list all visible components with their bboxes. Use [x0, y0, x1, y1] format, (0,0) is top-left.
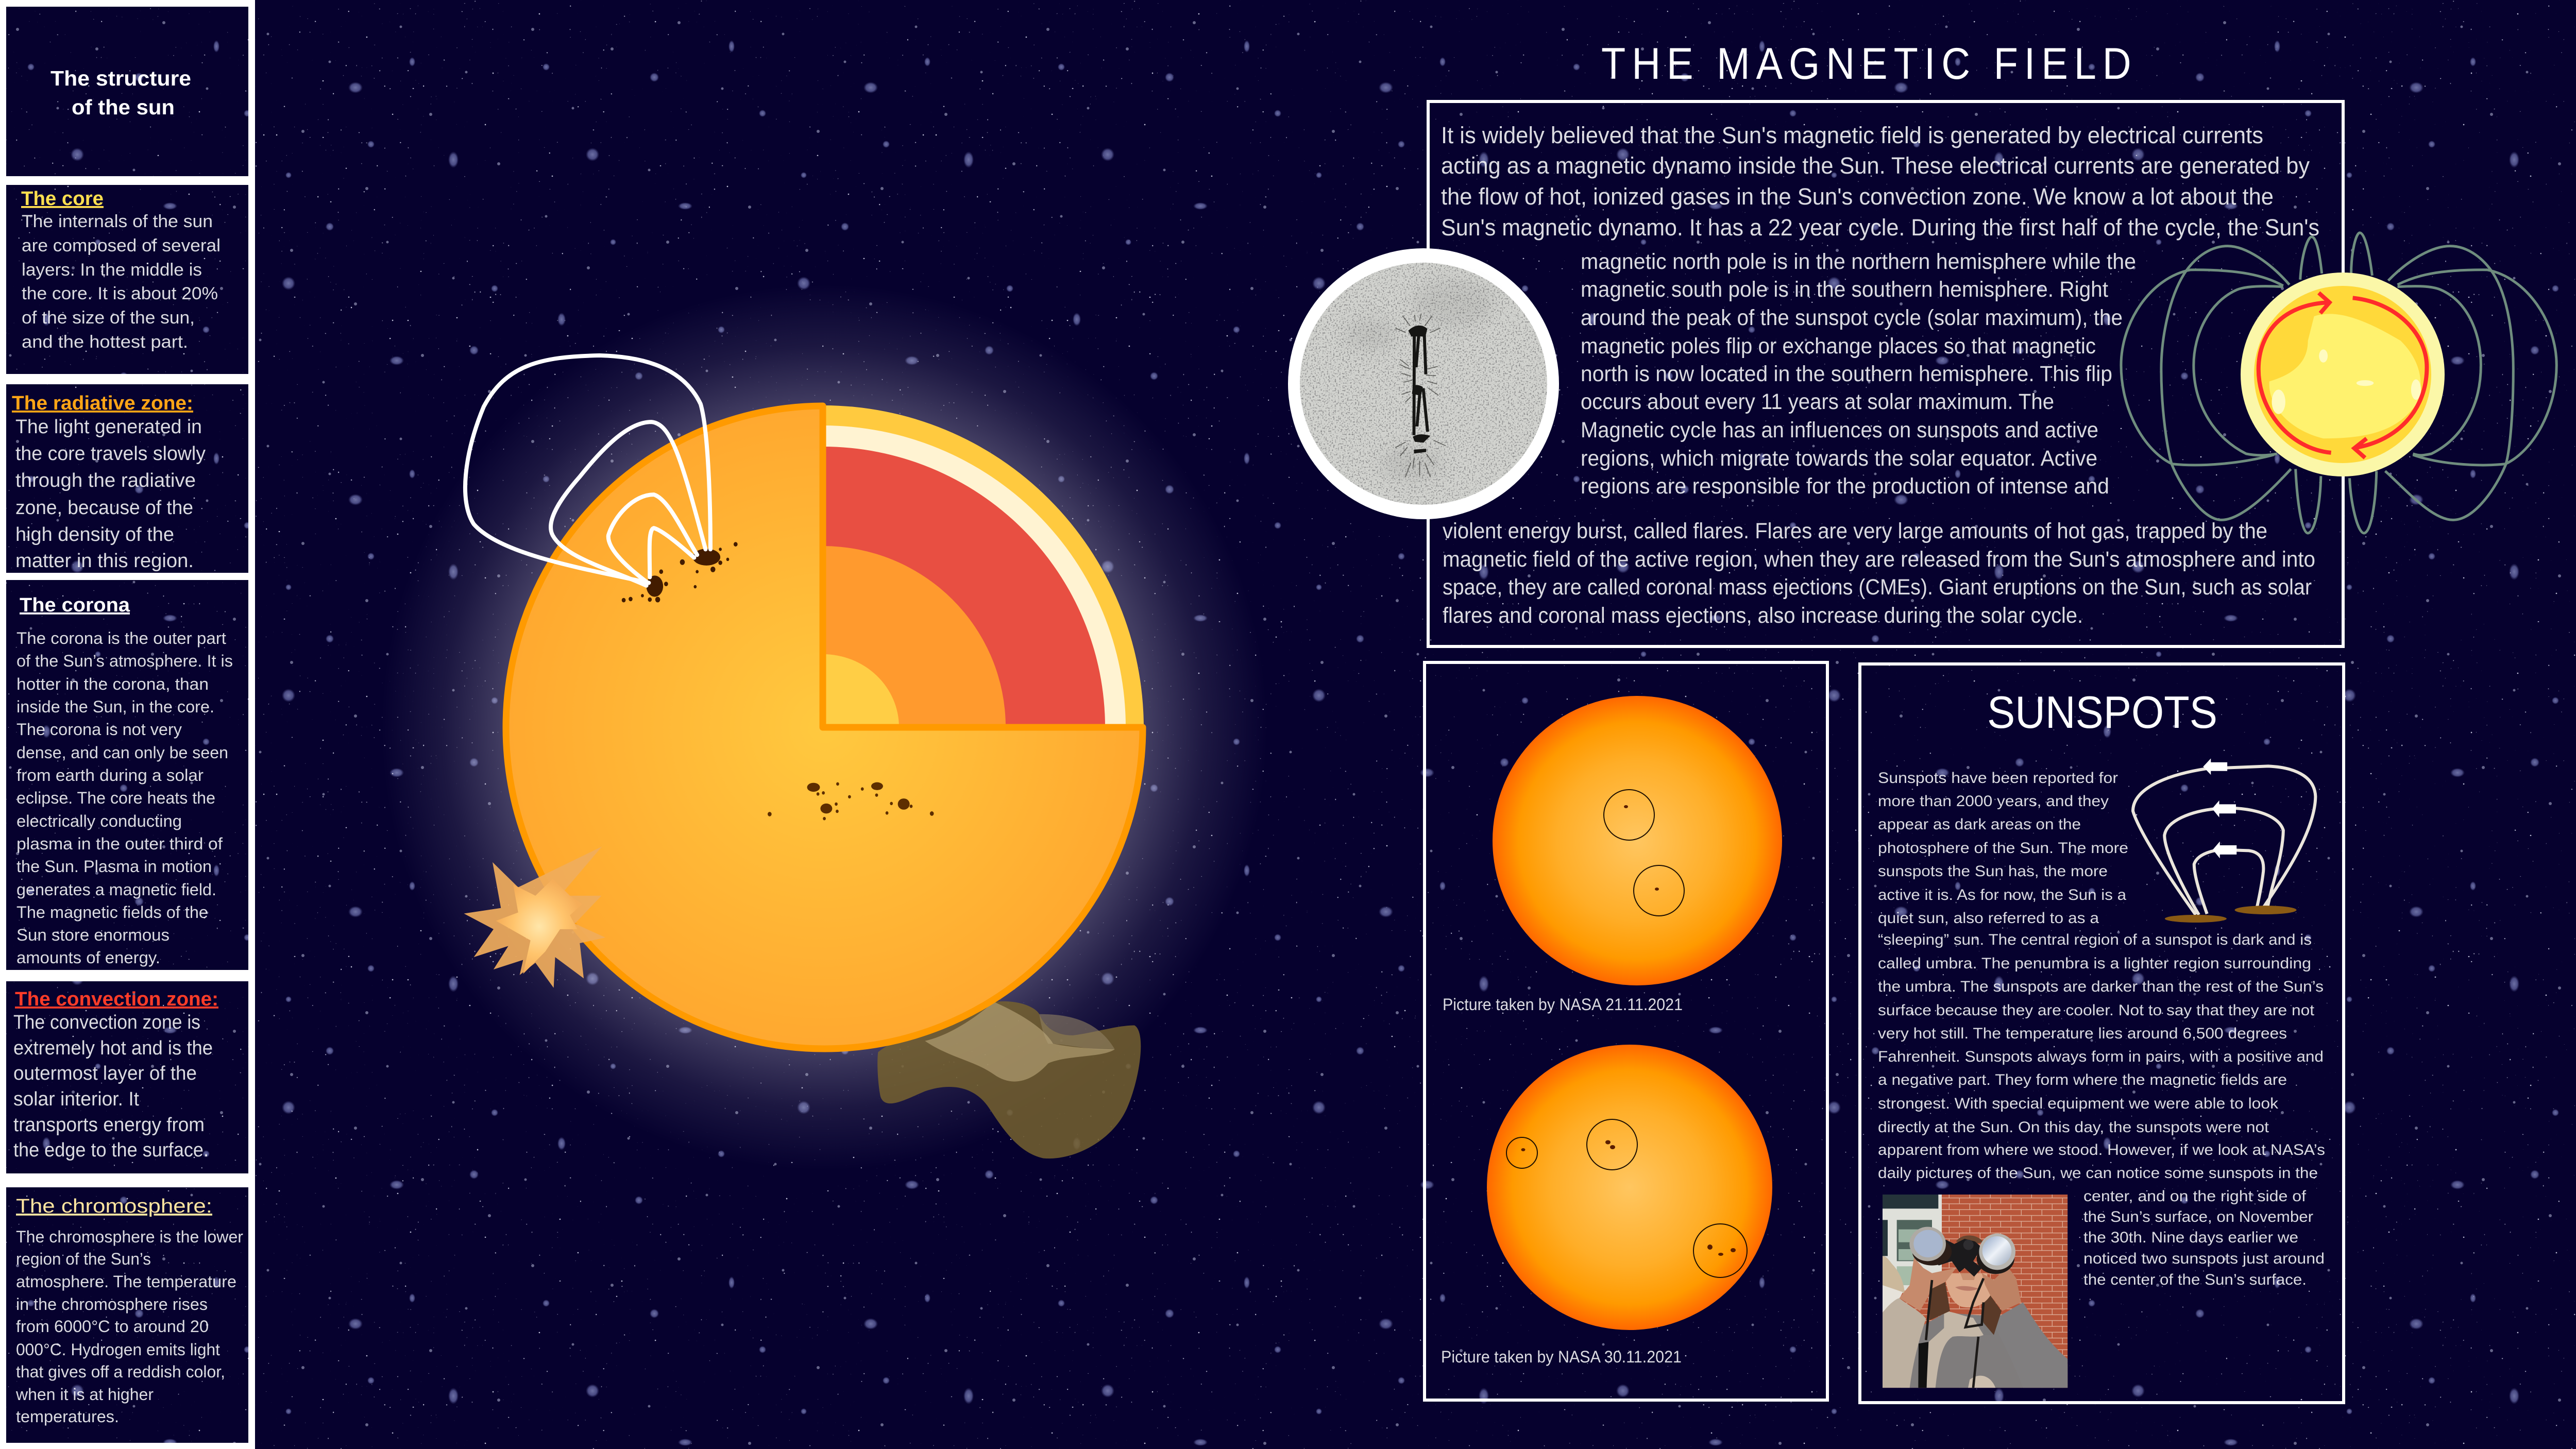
text: corona description: amounts of energy. — [16, 948, 160, 967]
text: chromosphere description: from 6000°C to around 20 — [16, 1317, 209, 1336]
text: radiative zone description — [15, 416, 206, 572]
hands — [1900, 1258, 1956, 1311]
text: convection zone description: The convection zone is — [13, 1012, 200, 1033]
text: magnetic field conclusion: flares and coronal mass ejections, also increase during the solar cycle. — [1443, 603, 2083, 628]
text: magnetic field middle: around the peak of the sunspot cycle (solar maximum), the — [1581, 305, 2123, 330]
text: magnetic field conclusion: violent energy burst, called flares. Flares are very large amounts of hot gas, trapped by the — [1443, 519, 2267, 543]
text: sunspots description: Fahrenheit. Sunspots always form in pairs, with a positive and — [1878, 1048, 2324, 1065]
text: corona description: Sun store enormous — [16, 926, 170, 944]
text: sunspots description: center, and on the right side of — [2083, 1188, 2307, 1205]
coronal mass ejection — [877, 1001, 1141, 1158]
text: sunspots description: surface because they are cooler. Not to say that they are not — [1878, 1002, 2315, 1019]
text: chromosphere description: region of the Sun’s — [16, 1250, 151, 1268]
text: magnetic field intro: It is widely believed that the Sun's magnetic field is generated by electrical currents — [1441, 122, 2263, 148]
text: chromosphere description: temperatures. — [16, 1407, 119, 1426]
text: sunspots description: a negative part. They form where the magnetic fields are — [1878, 1071, 2287, 1088]
layer: convection zone — [823, 447, 1105, 727]
sun structure diagram — [381, 284, 1267, 1170]
text: chromosphere description: The chromosphere is the lower — [16, 1228, 243, 1246]
heading: the radiative zone: The radiative zone: — [12, 393, 193, 414]
text: convection zone description: extremely hot and is the — [13, 1037, 213, 1059]
filing clouds — [1345, 281, 1494, 482]
heading: the structure of the sun: The structure — [50, 66, 191, 90]
text: corona description: plasma in the outer third of — [16, 834, 223, 853]
text: sunspots description: more than 2000 years, and they — [1878, 793, 2109, 810]
panel: the convection zone — [6, 981, 248, 1173]
heading: the structure of the sun: of the sun — [72, 95, 175, 119]
text: corona description: The corona is not very — [16, 720, 182, 739]
heading: the core: The core — [21, 188, 104, 210]
red rotation arrows — [2259, 293, 2427, 458]
text: convection zone description — [13, 1012, 213, 1161]
text: core description: The internals of the sun — [22, 212, 213, 231]
sun outer body — [506, 406, 1143, 1049]
text: sunspots description: sunspots the Sun has, the more — [1878, 863, 2108, 880]
text: corona description: generates a magnetic field. — [16, 880, 216, 899]
text: chromosphere description: 000°C. Hydrogen emits light — [16, 1340, 220, 1359]
caption 30.11.2021: Picture taken by NASA 30.11.2021 — [1441, 1348, 1682, 1366]
text: radiative zone description: zone, because of the — [15, 497, 193, 519]
text: magnetic field conclusion: magnetic field of the active region, when they are released from the Sun's atmosphere and into — [1443, 547, 2315, 572]
text: core description: the core. It is about 20% — [22, 284, 218, 303]
field lines — [2121, 233, 2556, 533]
text: radiative zone description: the core travels slowly — [15, 443, 206, 465]
text: magnetic field middle: regions, which migrate towards the solar equator. Active — [1581, 446, 2097, 471]
text: corona description: the Sun. Plasma in motion — [16, 857, 212, 876]
text: sunspots description: the umbra. The sunspots are darker than the rest of the Sun’s — [1878, 978, 2324, 995]
text: convection zone description: solar interior. It — [13, 1088, 139, 1110]
sun picture 21.11.2021 — [1493, 696, 1782, 985]
text: sunspots description: daily pictures of the Sun, we can notice some sunspots in the — [1878, 1165, 2318, 1182]
layer: chromosphere — [823, 405, 1144, 727]
text: magnetic field middle: north is now located in the southern hemisphere. This flip — [1581, 362, 2112, 386]
magnetic sun diagram — [2121, 233, 2556, 533]
layer: corona band — [823, 425, 1126, 727]
text: magnetic field middle — [1581, 249, 2136, 499]
sweater — [1901, 1312, 2067, 1388]
diagram: sunspot magnetic loops with arrows — [2133, 758, 2315, 923]
heading: the magnetic field: THE MAGNETIC FIELD — [1601, 39, 2135, 89]
solar flare — [464, 846, 605, 988]
heading: the structure of the sun — [50, 66, 191, 119]
cut-away sun layers — [823, 405, 1144, 727]
text: corona description: eclipse. The core heats the — [16, 789, 215, 807]
text: chromosphere description: when it is at higher — [15, 1385, 154, 1404]
heading: the corona: The corona — [20, 594, 130, 616]
face — [1945, 1273, 1990, 1307]
layer: radiative zone — [823, 546, 1006, 727]
left sidebar — [0, 0, 255, 1449]
panel: the radiative zone — [6, 384, 248, 573]
sun picture 30.11.2021 — [1487, 1045, 1772, 1330]
text: convection zone description: transports energy from — [13, 1114, 205, 1136]
text: sunspots description: very hot still. The temperature lies around 6,500 degrees — [1878, 1025, 2287, 1042]
text: magnetic field middle: magnetic south pole is in the southern hemisphere. Right — [1581, 277, 2108, 302]
text: sunspots description: quiet sun, also referred to as a — [1878, 910, 2099, 927]
text: magnetic field intro — [1441, 122, 2319, 241]
text: core description — [22, 212, 221, 352]
text: core description: layers. In the middle is — [22, 260, 202, 280]
panel: sunspots — [1860, 664, 2344, 1403]
panel: title — [6, 7, 248, 176]
text: sunspots description — [1878, 770, 2325, 1288]
text: corona description: The corona is the outer part — [16, 629, 226, 647]
panel: the corona — [6, 580, 248, 970]
text: convection zone description: outermost layer of the — [13, 1063, 197, 1084]
text: corona description: dense, and can only be seen — [16, 743, 228, 762]
text: sunspots description: “sleeping” sun. The central region of a sunspot is dark and is — [1878, 931, 2312, 948]
text: corona description: from earth during a solar — [16, 766, 204, 785]
bar magnet with filings — [1396, 314, 1445, 477]
iron filings magnet photo — [1288, 248, 1559, 519]
text: convection zone description: the edge to the surface. — [13, 1139, 209, 1161]
text: sunspots description: directly at the Sun. On this day, the sunspots were not — [1878, 1119, 2269, 1136]
text: core description: are composed of several — [22, 236, 221, 255]
text: radiative zone description: The light generated in — [15, 416, 202, 438]
text: chromosphere description: in the chromosphere rises — [16, 1295, 208, 1314]
layer: core — [823, 654, 899, 727]
panel: the core — [6, 185, 248, 374]
text: radiative zone description: matter in this region. — [15, 550, 194, 572]
text: magnetic field intro: acting as a magnetic dynamo inside the Sun. These electrical currents are generated by — [1441, 152, 2310, 179]
text: corona description: inside the Sun, in the core. — [16, 697, 214, 716]
text: sunspots description: appear as dark areas on the — [1878, 816, 2081, 833]
text: magnetic field conclusion — [1443, 519, 2315, 628]
sunspots on surface — [622, 542, 934, 820]
binoculars — [1932, 1239, 1982, 1276]
text: magnetic field conclusion: space, they are called coronal mass ejections (CMEs). Giant eruptions on the Sun, such as solar — [1443, 575, 2312, 600]
text: magnetic field middle: occurs about every 11 years at solar maximum. The — [1581, 389, 2054, 414]
text: sunspots description: Sunspots have been reported for — [1878, 770, 2118, 787]
text: radiative zone description: high density of the — [15, 524, 174, 545]
text: sunspots description: the Sun’s surface, on November — [2083, 1208, 2313, 1225]
panel: NASA sun pictures — [1425, 662, 1827, 1400]
text: corona description: hotter in the corona, than — [16, 675, 209, 693]
hair — [1929, 1280, 2002, 1335]
text: sunspots description: the center of the Sun’s surface. — [2083, 1271, 2307, 1288]
text: magnetic field intro: the flow of hot, ionized gases in the Sun's convection zone. We know a lot about the — [1441, 183, 2274, 210]
text: core description: and the hottest part. — [22, 332, 188, 352]
heading: sunspots: SUNSPOTS — [1987, 687, 2217, 738]
text: sunspots description: apparent from where we stood. However, if we look at NASA’s — [1878, 1141, 2325, 1158]
text: radiative zone description: through the radiative — [15, 470, 196, 491]
text: chromosphere description — [15, 1228, 243, 1426]
yellow sun — [2241, 272, 2445, 476]
text: sunspots description: active it is. As for now, the Sun is a — [1878, 887, 2126, 904]
photo: person with solar binoculars — [1883, 1195, 2067, 1388]
text: corona description: The magnetic fields of the — [16, 903, 208, 922]
text: core description: of the size of the sun, — [22, 308, 195, 328]
text: corona description — [16, 629, 233, 967]
magnetic loops — [465, 355, 710, 586]
text: sunspots description: called umbra. The penumbra is a lighter region surrounding — [1878, 955, 2311, 972]
text: sunspots description: strongest. With special equipment we were able to look — [1878, 1095, 2279, 1112]
text: sunspots description: noticed two sunspots just around — [2083, 1250, 2325, 1267]
sun corona glow — [381, 284, 1267, 1170]
text: magnetic field middle: magnetic north pole is in the northern hemisphere while the — [1581, 249, 2136, 274]
heading: the convection zone: The convection zone: — [15, 988, 218, 1010]
text: magnetic field middle: Magnetic cycle has an influences on sunspots and active — [1581, 418, 2098, 442]
text: magnetic field middle: magnetic poles flip or exchange places so that magnetic — [1581, 334, 2096, 359]
panel: magnetic field text — [1428, 101, 2343, 646]
caption 21.11.2021: Picture taken by NASA 21.11.2021 — [1443, 995, 1683, 1014]
text: chromosphere description: atmosphere. The temperature — [16, 1272, 236, 1291]
text: magnetic field middle: regions are responsible for the production of intense and — [1581, 474, 2109, 499]
text: corona description: electrically conducting — [16, 812, 182, 830]
text: sunspots description: the 30th. Nine days earlier we — [2083, 1229, 2298, 1246]
straps — [1926, 1278, 1984, 1388]
heading: the chromosphere: The chromosphere: — [16, 1196, 212, 1217]
text: corona description: of the Sun’s atmosphere. It is — [16, 652, 233, 670]
text: magnetic field intro: Sun's magnetic dynamo. It has a 22 year cycle. During the first half of the cycle, the Sun's — [1441, 214, 2319, 241]
text: sunspots description: photosphere of the Sun. The more — [1878, 840, 2128, 857]
panel: the chromosphere — [6, 1187, 248, 1443]
text: chromosphere description: that gives off a reddish color, — [16, 1362, 225, 1381]
